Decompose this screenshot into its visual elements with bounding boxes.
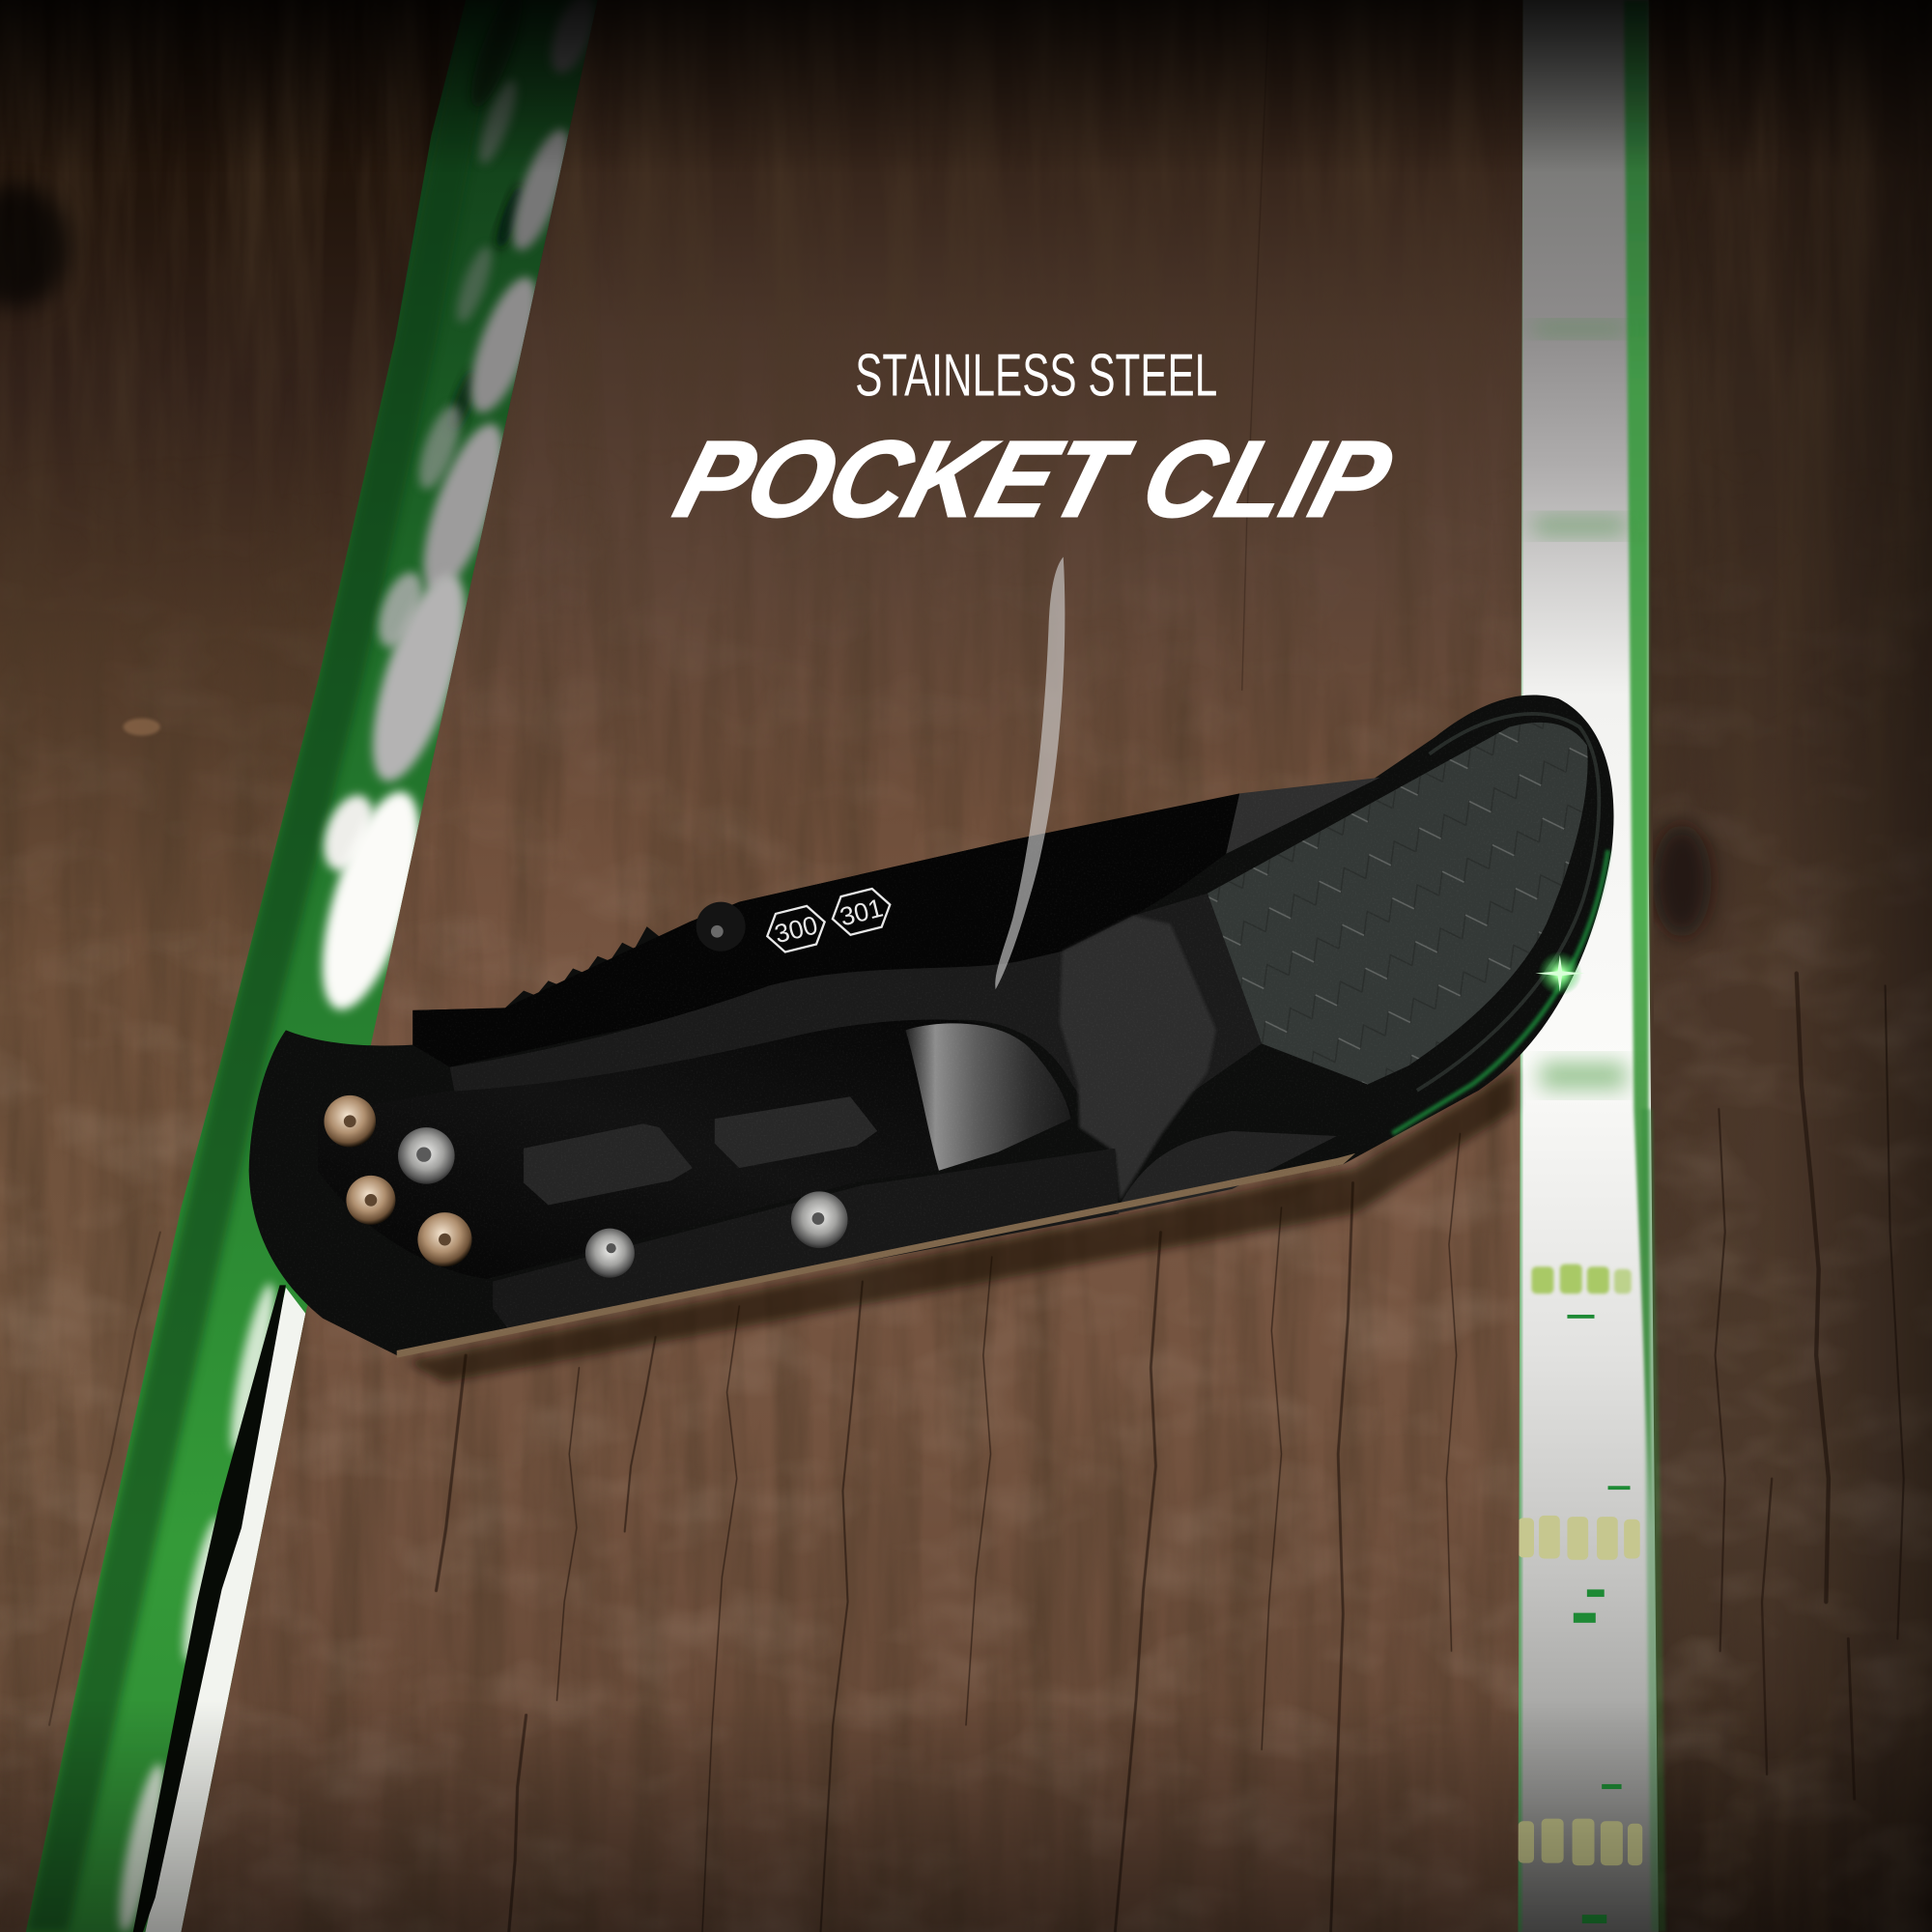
tan liner edge bbox=[397, 1153, 1355, 1358]
heading: stainless steel: STAINLESS STEEL bbox=[855, 341, 1217, 409]
lower handle scale bbox=[493, 1149, 1119, 1328]
clip slot 1 bbox=[524, 1123, 693, 1205]
knife shadow bbox=[407, 1069, 1516, 1382]
grip ridge line bbox=[1417, 714, 1599, 1091]
right strip green edges bbox=[1517, 0, 1651, 1932]
screw: silver 1 bbox=[398, 1127, 455, 1184]
textured grey bolster bbox=[1060, 916, 1216, 1200]
center wood plank bbox=[182, 0, 1523, 1932]
green rim light bbox=[1392, 850, 1608, 1133]
LED chip row 1 bbox=[1531, 1264, 1632, 1293]
grey blade tang bbox=[1226, 778, 1380, 854]
blade steel badge 300: 300 bbox=[772, 910, 820, 949]
small green pads bbox=[1567, 1315, 1631, 1923]
blade steel badge 301: 301 bbox=[837, 893, 886, 931]
heading: pocket clip: POCKET CLIP bbox=[664, 418, 1404, 540]
clip curved highlight bbox=[906, 1023, 1070, 1171]
rubber grip pad bbox=[1208, 723, 1588, 1084]
screw: gold 2 bbox=[346, 1176, 395, 1225]
left green LED strip bbox=[0, 0, 616, 1932]
knife with pocket clip bbox=[246, 690, 1620, 1382]
blade steel badge 300 bbox=[762, 903, 830, 955]
knife silhouette bbox=[249, 695, 1614, 1355]
right white LED strip bbox=[1516, 0, 1665, 1932]
right wood plank bbox=[1638, 0, 1932, 1932]
strip light band 3 bbox=[1540, 1062, 1627, 1090]
clip slot 2 bbox=[715, 1096, 877, 1168]
screw: silver 2 bbox=[585, 1229, 635, 1278]
screw: gold 3 bbox=[417, 1212, 472, 1266]
callout pointer line bbox=[995, 557, 1065, 989]
handle upper surface bbox=[450, 894, 1262, 1146]
blade steel badge 301 bbox=[828, 886, 895, 938]
screw: gold 1 bbox=[324, 1095, 376, 1148]
LED chip row 3 bbox=[1518, 1819, 1642, 1865]
green sparkle bbox=[1535, 952, 1584, 996]
screw: silver 3 bbox=[791, 1191, 848, 1248]
strip light band 1 bbox=[1534, 323, 1627, 335]
dark rear pad bbox=[1115, 1131, 1337, 1213]
strip light band 2 bbox=[1534, 518, 1627, 535]
left wood plank bbox=[0, 0, 493, 1932]
stainless steel pocket clip bbox=[318, 1019, 1072, 1279]
pivot pin bbox=[696, 902, 746, 952]
LED chip row 2 bbox=[1518, 1516, 1640, 1560]
folded black blade bbox=[412, 793, 1239, 1067]
speckle finish on knife bbox=[246, 690, 1620, 1361]
